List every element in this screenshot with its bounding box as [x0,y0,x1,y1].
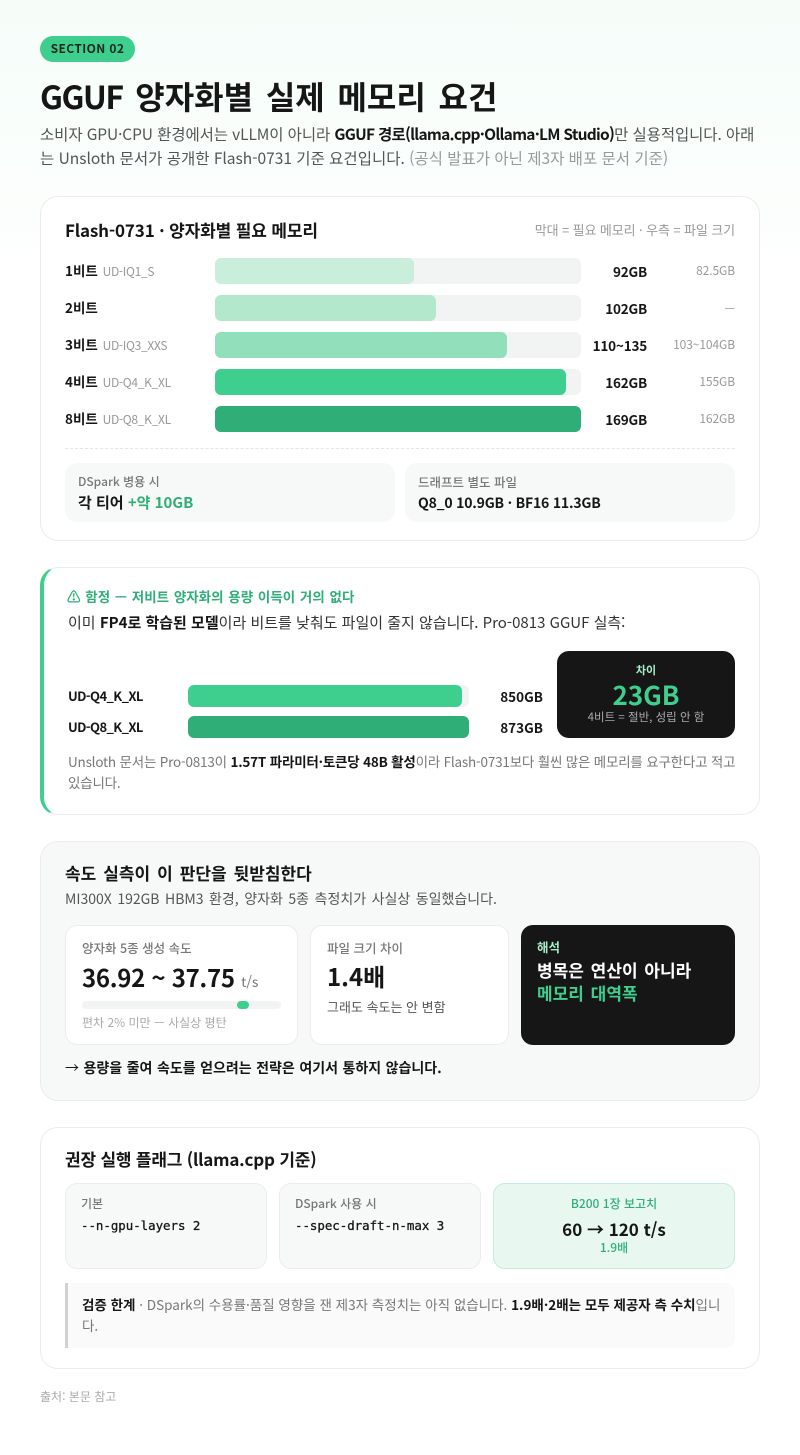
card: generation speed: 편차 2% 미만 — 사실상 평탄 [82,1014,227,1031]
info box: draft file: Q8_0 10.9GB · BF16 11.3GB [418,493,601,513]
card: B200 reported [493,1183,735,1269]
row: 1 bit: 1비트 UD-IQ1_S [65,260,154,280]
card: file size difference: 1.4배 [327,958,385,993]
callout: 23GB difference: 차이 [636,662,656,678]
card: generation speed: 양자화 5종 생성 속도 [82,938,192,957]
row: 1 bit [65,258,735,284]
flag: DSpark: DSpark 사용 시 [295,1195,377,1212]
flag: default: --n-gpu-layers 2 [81,1218,200,1233]
row: 1 bit: 82.5GB [696,262,735,279]
card: B200 reported: 1.9배 [600,1239,628,1256]
card: interpretation: 해석 [537,937,560,956]
row: 2 bit: 102GB [605,298,647,318]
speed sub text: MI300X 192GB HBM3 환경, 양자화 5종 측정치가 사실상 동일했습니다. [65,889,497,909]
info box: DSpark: 각 티어 +약 10GB [78,492,193,513]
row: 8 bit [65,406,735,432]
row: 8 bit: 169GB [605,409,647,429]
intro text: 소비자 GPU·CPU 환경에서는 vLLM이 아니라 GGUF 경로(llama.cpp·Ollama·LM Studio)만 실용적입니다. 아래 [40,123,754,145]
bar: Q8: UD-Q8_K_XL [68,717,143,736]
row: 2 bit [65,295,735,321]
intro text [40,123,754,169]
verification limits note [65,1283,735,1348]
flag: default [65,1183,267,1269]
pitfall note [68,751,735,792]
row: 3 bit: 103~104GB [673,336,735,353]
card: interpretation: 병목은 연산이 아니라 [537,957,691,982]
speed conclusion: → 용량을 줄여 속도를 얻으려는 전략은 여기서 통하지 않습니다. [65,1058,442,1078]
row: 2 bit: 2비트 [65,297,98,317]
intro text: 는 Unsloth 문서가 공개한 Flash-0731 기준 요건입니다. (공식 발표가 아닌 제3자 배포 문서 기준) [40,147,668,169]
row: 1 bit: 92GB [613,261,647,281]
legend note: 막대 = 필요 메모리 · 우측 = 파일 크기 [535,220,735,239]
card: file size difference: 그래도 속도는 안 변함 [327,997,446,1016]
section badge [40,36,135,62]
callout: 23GB difference [557,651,735,738]
verification limits note: 검증 한계 · DSpark의 수용률·품질 영향을 잰 제3자 측정치는 아직 없습니다. 1.9배·2배는 모두 제공자 측 수치입니 [82,1294,720,1314]
bar: Q8: 873GB [500,717,543,737]
flag: default: 기본 [81,1195,103,1212]
row: 8 bit: 8비트 UD-Q8_K_XL [65,408,171,428]
range bar [82,1001,281,1009]
row: 3 bit: 3비트 UD-IQ3_XXS [65,334,167,354]
card: file size difference: 파일 크기 차이 [327,938,403,957]
panel heading: Flash-0731 · 양자화별 필요 메모리 [65,217,318,242]
info box: DSpark: DSpark 병용 시 [78,473,160,490]
row: 3 bit: 110~135 [593,335,647,355]
row: 4 bit: 155GB [699,373,735,390]
row: 3 bit [65,332,735,358]
panel: flags [40,1127,760,1369]
row: 2 bit: — [724,299,735,316]
pitfall heading: ⚠ 함정 — 저비트 양자화의 용량 이득이 거의 없다 [67,586,354,606]
card: generation speed: 36.92 ~ 37.75 t/s [82,959,258,994]
info box: draft file [405,463,735,522]
panel: memory requirements [40,196,760,541]
speed heading: 속도 실측이 이 판단을 뒷받침한다 [65,860,312,885]
source: 출처: 본문 참고 [40,1388,116,1405]
info box: draft file: 드래프트 별도 파일 [418,472,517,491]
pitfall note: Unsloth 문서는 Pro-0813이 1.57T 파라미터·토큰당 48B 활성이라 Flash-0731보다 훨씬 많은 메모리를 요구한다고 적고 [68,751,735,771]
row: 4 bit [65,369,735,395]
row: 4 bit: 4비트 UD-Q4_K_XL [65,371,171,391]
card: file size difference [310,925,509,1045]
bar: Q4: 850GB [500,686,543,706]
pitfall note: 있습니다. [68,772,120,792]
verification limits note: 다. [82,1315,98,1335]
flag: DSpark [279,1183,481,1269]
callout: 23GB difference: 23GB [612,676,680,713]
flag: DSpark: --spec-draft-n-max 3 [295,1218,444,1233]
card: interpretation [521,925,735,1045]
bar: Q4 [68,685,543,707]
row: 8 bit: 162GB [699,410,735,427]
card: interpretation: 메모리 대역폭 [537,980,638,1005]
row: 4 bit: 162GB [605,372,647,392]
title: GGUF 양자화별 실제 메모리 요건 [40,73,497,119]
callout: 23GB difference: 4비트 = 절반, 성립 안 함 [588,709,704,725]
card: generation speed [65,925,298,1045]
info box: DSpark [65,463,395,522]
card: B200 reported: 60 → 120 t/s [562,1216,666,1241]
bar: Q8 [68,716,543,738]
bar: Q4: UD-Q4_K_XL [68,686,143,705]
pitfall text: 이미 FP4로 학습된 모델이라 비트를 낮춰도 파일이 줄지 않습니다. Pro-0813 GGUF 실측: [68,612,625,633]
panel: speed [40,841,760,1101]
card: B200 reported: B200 1장 보고치 [571,1195,657,1212]
flags heading: 권장 실행 플래그 (llama.cpp 기준) [65,1146,316,1171]
section badge: SECTION 02 [51,40,124,57]
panel: pitfall [40,567,760,815]
